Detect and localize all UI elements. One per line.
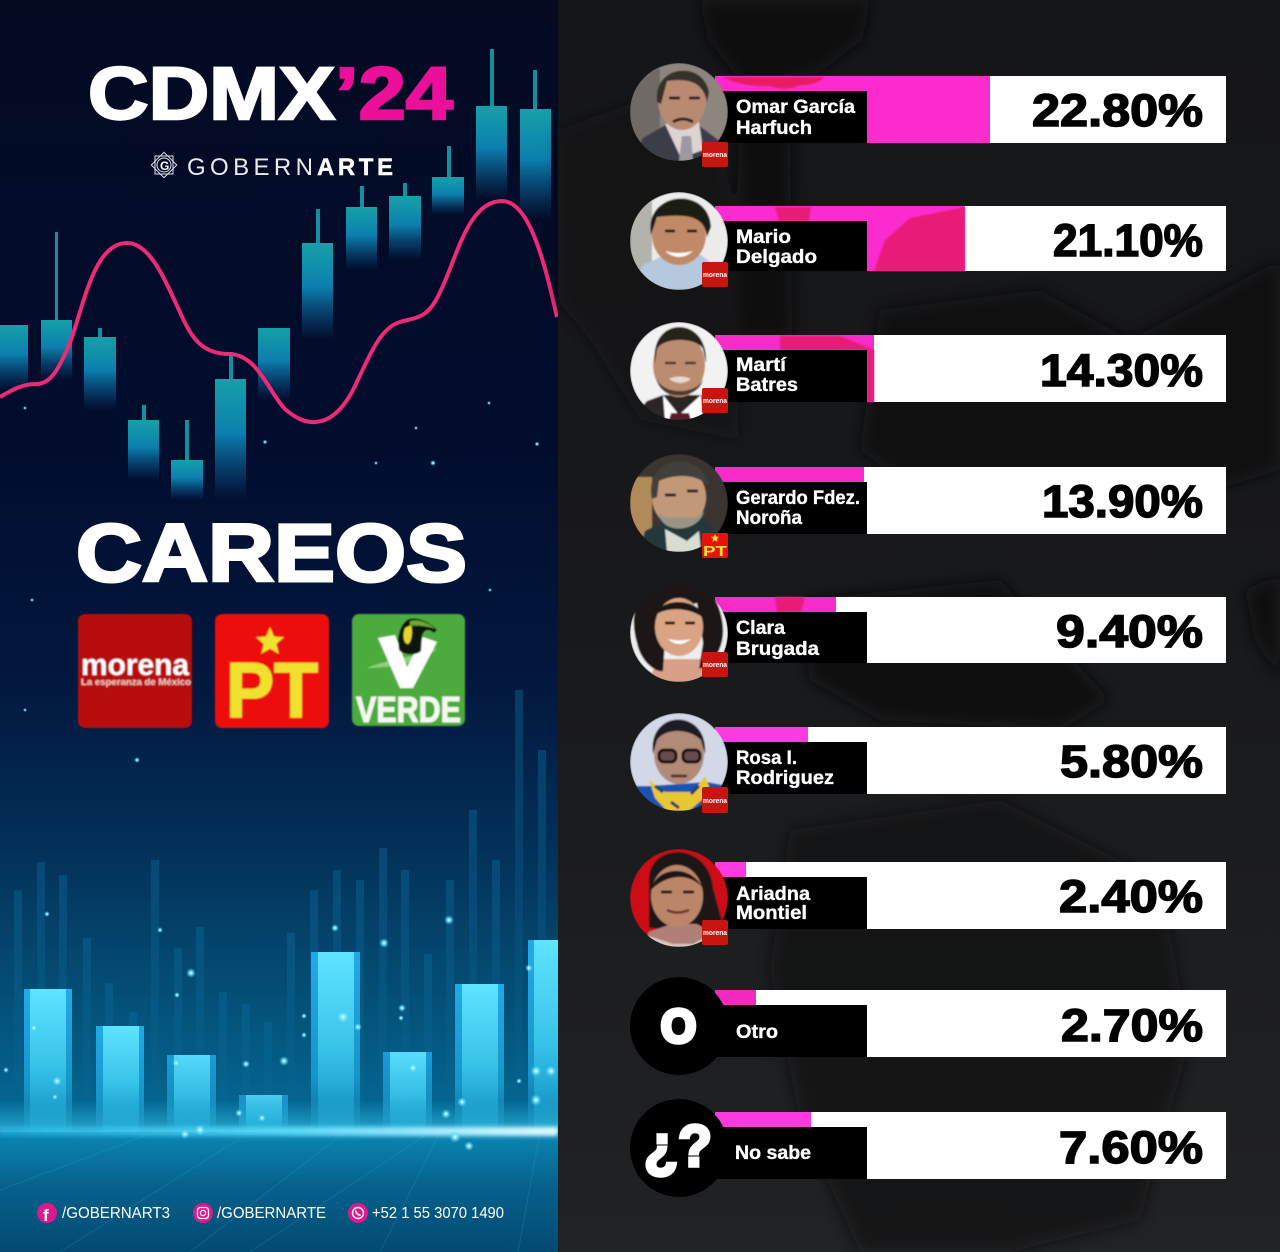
party badge: morena <box>702 920 728 945</box>
option letter: O <box>661 1000 696 1052</box>
icon circle <box>630 1099 728 1197</box>
percentage: 5.80% <box>1060 736 1203 787</box>
bar track <box>715 335 1226 402</box>
candidate name <box>736 747 834 789</box>
statue tint <box>775 207 965 271</box>
row: Omar García Harfuch <box>630 63 1226 167</box>
floor with perspective grid <box>0 1132 558 1252</box>
portrait <box>630 454 728 552</box>
footer: social contacts <box>37 1203 504 1225</box>
candidate name <box>736 487 860 529</box>
facebook handle: /GOBERNART3 <box>62 1205 170 1222</box>
row: Otro <box>630 977 1226 1075</box>
logo: Gobernarte: G <box>160 159 169 173</box>
name label <box>715 612 867 663</box>
bar track <box>715 206 1226 271</box>
bar chart: foreground bright bars <box>24 940 558 1132</box>
portrait <box>630 849 728 947</box>
candidate name <box>736 617 819 660</box>
bar track <box>715 597 1226 663</box>
party badge: morena: morena <box>703 398 727 405</box>
row: Gerardo Fdez. Noroña <box>630 454 1226 560</box>
question marks: ¿? <box>644 1114 712 1179</box>
name label <box>700 1005 867 1057</box>
title <box>88 52 453 135</box>
pink share bar <box>715 597 836 612</box>
portrait <box>630 322 728 420</box>
candidate name: Clara <box>736 617 785 639</box>
icon: whatsapp <box>348 1203 368 1223</box>
bar track <box>715 990 1226 1057</box>
name label <box>715 221 867 271</box>
bar track <box>715 727 1226 794</box>
party badge: morena: morena <box>703 272 727 279</box>
candidate name: Ariadna <box>736 883 810 905</box>
wordmark <box>187 154 393 181</box>
candidate name: Montiel <box>736 902 807 924</box>
bar track <box>715 862 1226 929</box>
candidate name: Martí <box>736 354 787 376</box>
logo: PT: PT <box>226 646 318 734</box>
pink share bar <box>715 76 990 143</box>
title: ’24 <box>335 52 453 135</box>
title: CDMX <box>88 52 335 135</box>
icon: G diamond <box>151 152 177 178</box>
candidate name: Rosa I. <box>736 747 797 769</box>
party badge: morena <box>702 652 728 677</box>
candidate name: Brugada <box>736 638 819 660</box>
candidate name <box>736 883 810 924</box>
option name: No sabe <box>735 1142 811 1164</box>
panel: left blue background <box>0 0 558 1252</box>
party badge: morena: morena <box>703 662 727 669</box>
pink trend line <box>0 201 557 422</box>
percentage: 7.60% <box>1059 1122 1203 1173</box>
party badge: PT: PT <box>703 543 727 560</box>
logo: Verde: VERDE <box>356 689 461 730</box>
name label <box>715 350 867 402</box>
percentage: 14.30% <box>1040 345 1203 396</box>
candidate name: Omar García <box>736 96 855 118</box>
pink share bar <box>715 727 808 742</box>
pink share bar <box>715 335 874 402</box>
candidate name: Noroña <box>736 507 802 529</box>
pink share bar <box>715 990 756 1005</box>
pink share bar <box>715 1112 811 1127</box>
option name: Otro <box>736 1021 778 1043</box>
bar track <box>715 467 1226 534</box>
name label <box>715 877 867 929</box>
row: Rosa I. Rodriguez <box>630 713 1226 813</box>
party badge: morena: morena <box>703 152 727 159</box>
name label <box>700 1127 867 1179</box>
instagram handle: /GOBERNARTE <box>217 1205 326 1222</box>
percentage: 13.90% <box>1042 476 1203 527</box>
row: No sabe <box>630 1099 1226 1197</box>
portrait <box>630 63 728 161</box>
name label <box>715 482 867 534</box>
logo: morena: La esperanza de México <box>81 677 192 687</box>
candidate name <box>736 354 798 396</box>
portrait <box>630 192 728 290</box>
statue tint <box>780 336 874 402</box>
heading: CAREOS: CAREOS <box>76 508 467 599</box>
row: Mario Delgado <box>630 192 1226 290</box>
name label <box>715 91 867 143</box>
candidate name: Gerardo Fdez. <box>736 487 860 509</box>
portrait <box>630 596 728 682</box>
particles <box>3 401 557 1151</box>
wordmark: ARTE <box>317 154 393 181</box>
candidate name: Harfuch <box>736 117 812 139</box>
statue tint <box>775 597 805 612</box>
party badge: morena: morena <box>703 798 727 805</box>
logo: Gobernarte <box>151 152 393 181</box>
portrait <box>630 713 728 811</box>
icon: instagram <box>193 1203 213 1223</box>
candidate name <box>736 96 855 139</box>
party badge: PT <box>702 533 728 560</box>
icon: facebook: f <box>43 1206 49 1225</box>
wordmark: GOBERN <box>187 154 313 181</box>
party badge: morena <box>702 262 728 287</box>
panel: right dark background <box>558 0 1280 1252</box>
candidate name <box>736 226 817 268</box>
background thin bars <box>14 690 546 1050</box>
glowing horizon <box>0 1100 558 1136</box>
logo: morena: morena <box>81 647 190 682</box>
name label <box>715 742 867 794</box>
statue tint <box>722 77 824 89</box>
logo: Verde <box>352 614 465 730</box>
party badge: morena: morena <box>703 930 727 937</box>
phone number: +52 1 55 3070 1490 <box>372 1205 504 1222</box>
row: Martí Batres <box>630 322 1226 420</box>
candlestick chart <box>0 49 551 500</box>
candidate name: Rodriguez <box>736 767 834 789</box>
pink share bar <box>715 467 864 534</box>
logo: PT <box>215 614 329 734</box>
percentage: 2.40% <box>1059 871 1203 922</box>
party badge: morena <box>702 388 728 413</box>
pink share bar <box>715 206 965 271</box>
candidate name: Mario <box>736 226 791 248</box>
row: Ariadna Montiel <box>630 849 1226 947</box>
bar track <box>715 1112 1226 1179</box>
percentage: 22.80% <box>1032 85 1203 136</box>
logo: morena <box>78 614 192 728</box>
icon circle <box>630 977 728 1075</box>
candidate name: Batres <box>736 374 798 396</box>
row: Clara Brugada <box>630 596 1226 682</box>
percentage: 21.10% <box>1053 215 1203 266</box>
party badge: morena <box>702 142 728 167</box>
statue silhouette <box>558 0 1280 1252</box>
pink share bar <box>715 862 746 877</box>
bar track <box>715 76 1226 143</box>
icon: facebook <box>37 1203 57 1225</box>
percentage: 2.70% <box>1061 1000 1203 1051</box>
candidate name: Delgado <box>736 246 817 268</box>
percentage: 9.40% <box>1056 606 1203 657</box>
party badge: morena <box>702 787 728 813</box>
